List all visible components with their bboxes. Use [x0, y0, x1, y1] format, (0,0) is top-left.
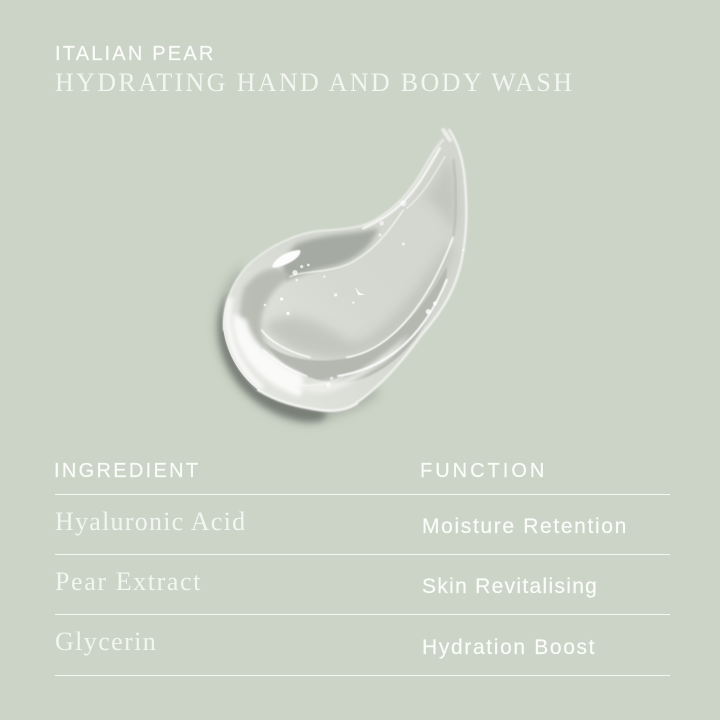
illustration: transparent gel swatch	[212, 128, 468, 428]
title: product name: ITALIAN PEAR	[55, 43, 216, 65]
gel body	[223, 170, 462, 410]
subtitle: product type: HYDRATING HAND AND BODY WASH	[55, 68, 574, 97]
row 1 function: Moisture Retention	[422, 515, 628, 538]
row 1 ingredient: Hyaluronic Acid	[55, 507, 246, 536]
bright lower pad	[233, 313, 304, 397]
row 2 function: Skin Revitalising	[422, 575, 598, 598]
right grey shade inside tail	[428, 166, 458, 224]
pool soft shade	[263, 240, 453, 359]
row 3 ingredient: Glycerin	[55, 627, 157, 656]
gel rim highlights	[224, 130, 466, 411]
shadow: gel swatch	[216, 263, 380, 423]
column header: function: FUNCTION	[420, 460, 547, 482]
table: ingredients and functions	[54, 460, 670, 676]
grey upper channel	[283, 228, 378, 280]
grey left inner lobe	[240, 269, 290, 357]
glare spot and bubbles	[264, 200, 465, 387]
lower grey band	[265, 267, 447, 383]
row 2 ingredient: Pear Extract	[55, 567, 202, 596]
row 3 function: Hydration Boost	[422, 636, 596, 659]
column header: ingredient: INGREDIENT	[54, 460, 200, 482]
